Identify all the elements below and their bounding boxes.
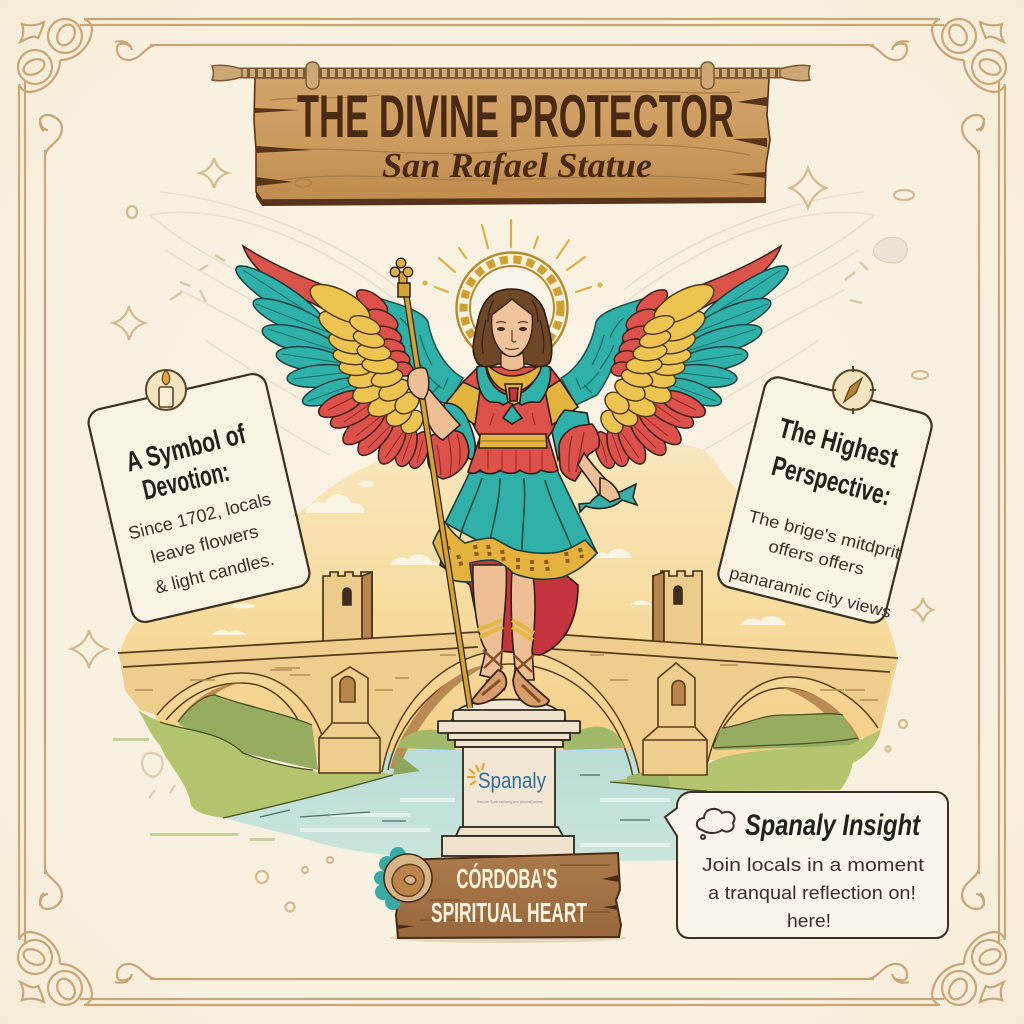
medallion <box>374 847 432 910</box>
title plank with rope <box>212 62 810 206</box>
logo: Spanaly: Spanaly <box>478 768 546 793</box>
callout: Spanaly Insight <box>665 792 948 938</box>
right wing <box>561 246 794 471</box>
icon: candle <box>146 370 186 410</box>
heading: The Highest Perspective: Perspective: <box>769 450 894 512</box>
title text: San Rafael Statue <box>382 146 652 185</box>
staff <box>390 258 470 708</box>
heading: The Highest Perspective: The Highest <box>776 412 901 474</box>
red cloak behind legs <box>440 545 578 655</box>
river streaks <box>260 775 670 845</box>
sign text: CÓRDOBA'S <box>456 863 558 894</box>
icon: thought cloud <box>697 809 735 839</box>
text: perspective body: offers offers <box>766 537 866 579</box>
faint sketched wings <box>150 192 907 455</box>
text: perspective body: panaramic city views <box>727 563 893 622</box>
text: devotion body <box>126 489 276 598</box>
sign text <box>431 863 587 928</box>
sign text: SPIRITUAL HEART <box>431 897 587 928</box>
heading: A Symbol of Devotion: Devotion: <box>140 456 232 506</box>
left wing <box>230 246 463 471</box>
card: A Symbol of Devotion <box>86 371 312 625</box>
arms and fish <box>420 388 637 512</box>
sign: Córdoba's Spiritual Heart <box>374 847 626 943</box>
heading: The Highest Perspective <box>769 412 901 512</box>
clouds <box>212 481 786 635</box>
green banks <box>113 695 880 841</box>
title text: THE DIVINE PROTECTOR <box>297 83 734 150</box>
callout body: a tranqual reflection on! <box>708 882 916 903</box>
text: devotion body: & light candles. <box>153 549 276 598</box>
icon: compass <box>830 366 876 414</box>
halo with rays <box>422 220 602 364</box>
towers <box>323 571 702 645</box>
bridge piers <box>319 663 707 775</box>
text: perspective body: The brige's mitdprit <box>746 507 903 563</box>
rope <box>212 62 810 89</box>
text: devotion body: leave flowers <box>149 521 260 567</box>
heading: A Symbol of Devotion <box>123 418 249 506</box>
logo: Spanaly <box>467 763 546 804</box>
river <box>223 750 700 861</box>
legs and sandals <box>472 565 549 707</box>
tunic <box>428 363 599 481</box>
head with hair <box>473 289 552 370</box>
callout body: here! <box>787 910 831 931</box>
callout heading: Spanaly Insight <box>745 809 922 842</box>
title text <box>297 83 734 185</box>
text: perspective body <box>727 507 903 622</box>
pedestal <box>438 700 580 856</box>
stone bridge <box>118 632 898 777</box>
sky background <box>120 444 898 762</box>
wooden plank <box>254 78 770 206</box>
heading: A Symbol of Devotion: A Symbol of <box>123 418 249 478</box>
teal skirt <box>433 470 597 582</box>
logo: Spanaly: Discover Spain exploring your personal journey <box>477 799 543 804</box>
callout body: Join locals in a moment <box>702 854 924 875</box>
sparkles and dots <box>71 158 933 912</box>
card: The Highest Perspective <box>715 374 935 626</box>
text: devotion body: Since 1702, locals <box>126 489 273 544</box>
callout body <box>702 854 924 931</box>
